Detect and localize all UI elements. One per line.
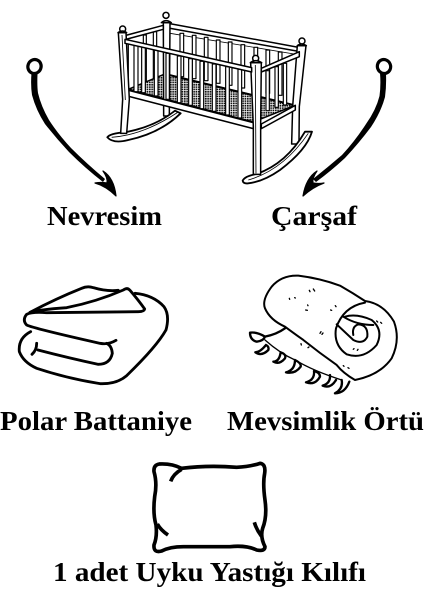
icon: pillow <box>154 463 266 552</box>
icon: rocking cradle <box>107 12 312 183</box>
cradle lower rail <box>127 90 253 129</box>
throw speckles <box>289 289 382 368</box>
cradle mesh base <box>128 74 295 122</box>
cradle back rail <box>168 23 300 52</box>
cradle rockers <box>107 111 181 141</box>
cradle front rail <box>125 39 252 72</box>
icon: folded blanket <box>19 287 168 384</box>
heading: Çarşaf: Çarşaf <box>271 201 358 231</box>
cradle front spindles <box>134 45 287 118</box>
throw fringe <box>250 328 349 393</box>
cradle front posts <box>118 33 129 133</box>
heading: Mevsimlik Örtü: Mevsimlik Örtü <box>227 406 424 436</box>
cradle post finials <box>120 26 126 32</box>
icon: rolled seasonal throw <box>250 276 397 393</box>
heading: Nevresim: Nevresim <box>47 201 163 231</box>
cradle back posts and side rails <box>163 23 170 116</box>
heading: Polar Battaniye: Polar Battaniye <box>0 406 192 436</box>
arrow: to Çarşaf <box>303 58 393 196</box>
arrow: to Nevresim <box>26 58 116 196</box>
heading: 1 adet Uyku Yastığı Kılıfı: 1 adet Uyku Yastığı Kılıfı <box>53 557 367 587</box>
cradle back spindles <box>128 32 282 95</box>
